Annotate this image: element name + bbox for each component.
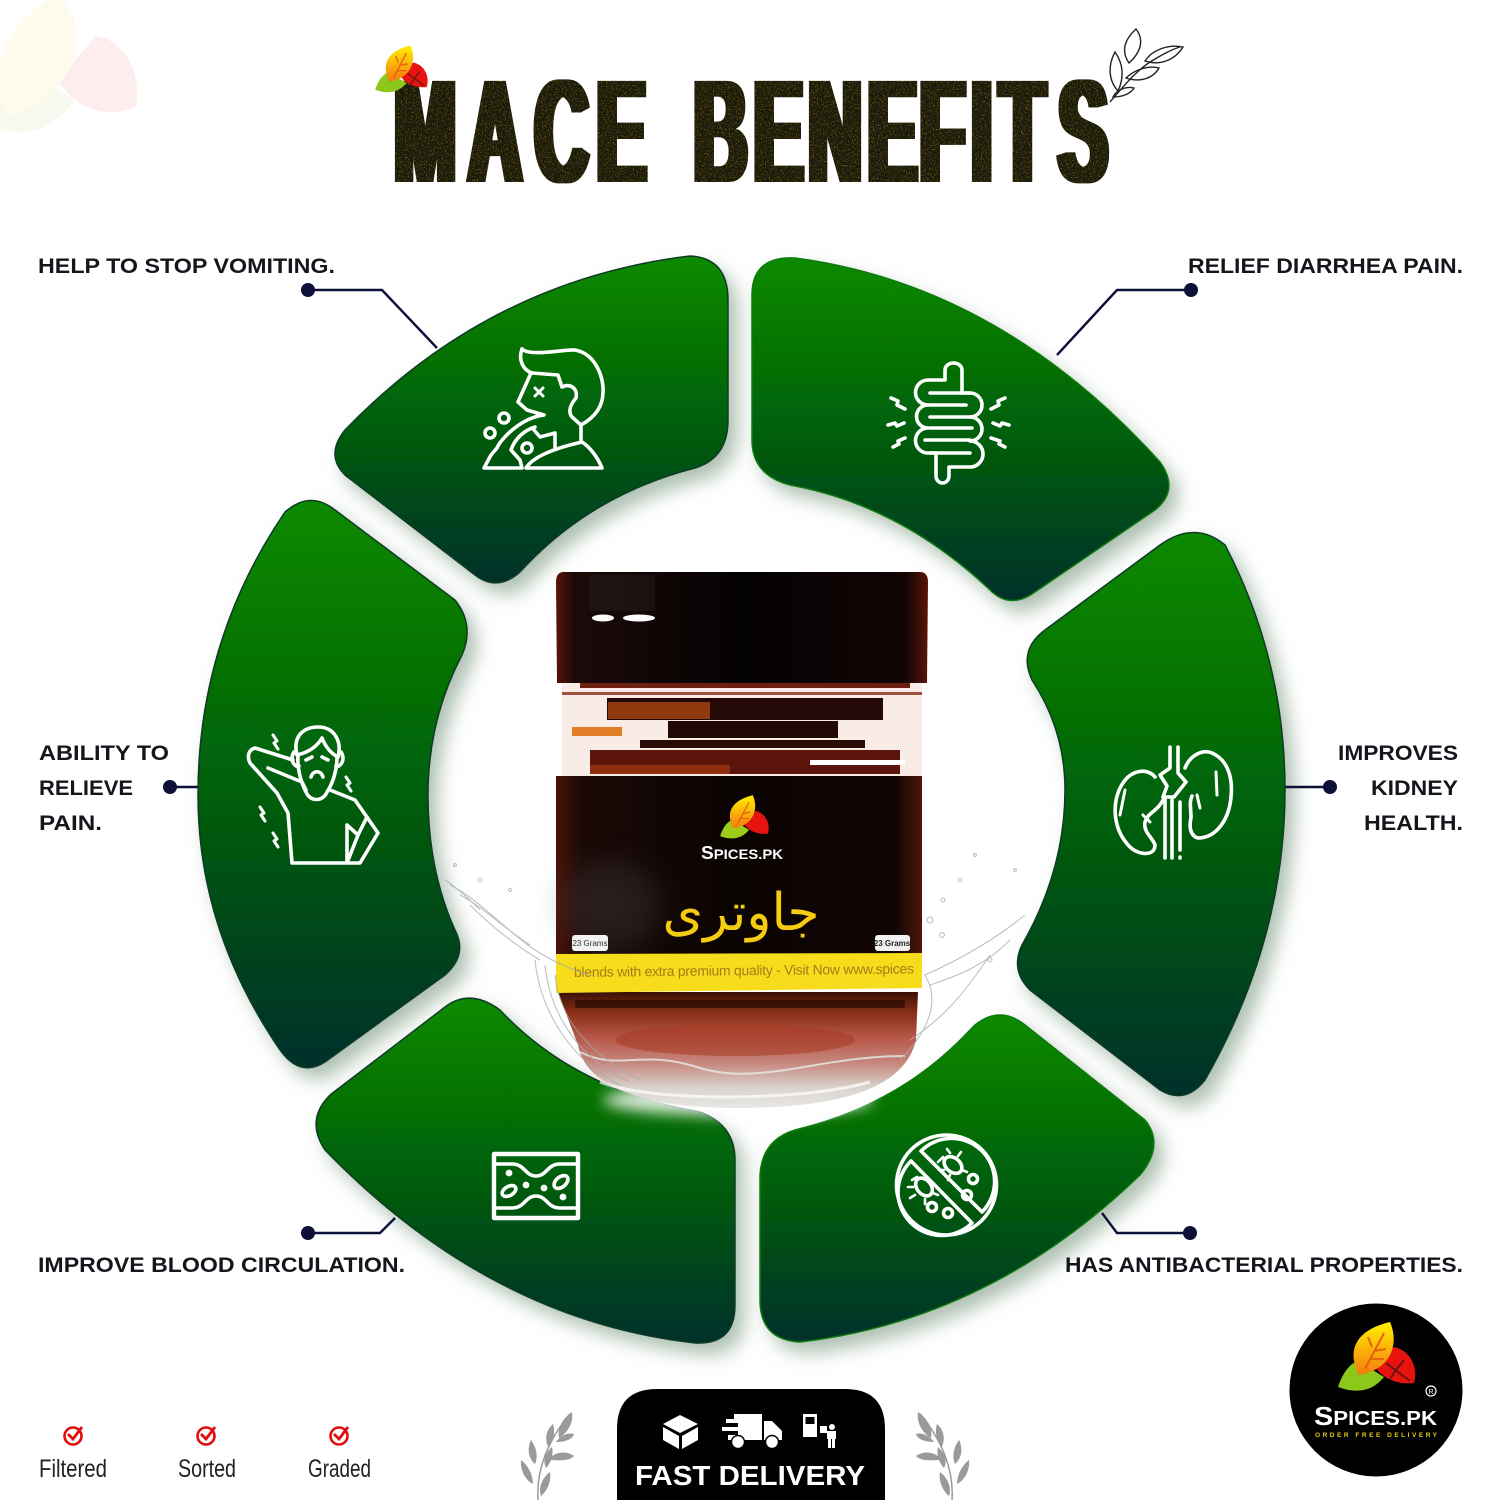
icon: blood vessel xyxy=(494,1154,578,1218)
panel: pain wedge xyxy=(198,500,467,1068)
icon: title sprig xyxy=(1110,29,1183,102)
icon: truck xyxy=(722,1414,782,1448)
badge: graded: Graded xyxy=(308,1455,371,1483)
connector: pain xyxy=(163,780,198,794)
connector: antibacterial xyxy=(1102,1213,1197,1240)
text: ability to relieve pain: ABILITY TO xyxy=(39,742,169,765)
text: relief diarrhea pain: RELIEF DIARRHEA PAIN. xyxy=(1188,255,1463,278)
jar weight tags xyxy=(572,935,911,951)
logo: spices.pk badge: R xyxy=(1428,1389,1434,1396)
jar yellow band xyxy=(556,953,922,993)
jar lid xyxy=(556,572,928,683)
decorative sprig left xyxy=(521,1412,574,1500)
text: ability to relieve pain: PAIN. xyxy=(39,812,102,835)
panel: antibacterial wedge xyxy=(760,1015,1154,1342)
panel: diarrhea wedge xyxy=(752,258,1169,601)
text: help to stop vomiting: HELP TO STOP VOMITING. xyxy=(38,255,335,278)
text: improve blood circulation: IMPROVE BLOOD CIRCULATION. xyxy=(38,1254,405,1277)
icon: vomiting man xyxy=(484,349,603,468)
icon: delivery kiosk xyxy=(803,1414,836,1448)
logo: spices.pk badge: ORDER FREE DELIVERY xyxy=(1315,1432,1438,1439)
jar urdu name: جاوتری xyxy=(663,883,819,943)
jar label xyxy=(556,776,922,956)
decorative sprig right xyxy=(916,1412,969,1500)
icon: intestine xyxy=(888,363,1009,483)
text: improves kidney health: KIDNEY xyxy=(1371,777,1458,800)
text: fast delivery: FAST DELIVERY xyxy=(635,1460,865,1491)
badge: sorted: Sorted xyxy=(178,1455,236,1483)
badge: filtered: Filtered xyxy=(39,1455,107,1483)
icon: kidneys xyxy=(1115,747,1231,858)
panel: blood circulation wedge xyxy=(316,998,735,1343)
jar weight tags: 23 Grams xyxy=(874,939,911,948)
badge: sorted xyxy=(178,1427,236,1483)
water splash xyxy=(445,854,1025,1085)
title: BENEFITS xyxy=(694,49,1108,214)
text: has antibacterial properties: HAS ANTIBACTERIAL PROPERTIES. xyxy=(1065,1254,1463,1277)
text: improves kidney health: HEALTH. xyxy=(1364,812,1463,835)
text: ability to relieve pain xyxy=(39,742,169,835)
title: MACE xyxy=(394,49,646,214)
jar leaves logo xyxy=(720,795,769,838)
text: improves kidney health xyxy=(1338,742,1463,835)
faded leaves watermark xyxy=(0,0,137,132)
product jar xyxy=(445,572,1025,1116)
panel: vomiting wedge xyxy=(335,256,728,583)
jar weight tags: 23 Grams xyxy=(572,939,608,948)
jar base xyxy=(558,992,918,1108)
icon: title leaves xyxy=(375,46,428,92)
logo: spices.pk badge xyxy=(1290,1304,1462,1476)
connector: vomiting xyxy=(301,283,437,348)
badge: graded xyxy=(308,1427,371,1483)
icon: no bacteria xyxy=(896,1135,996,1235)
connector: diarrhea xyxy=(1057,283,1198,355)
text: ability to relieve pain: RELIEVE xyxy=(39,777,133,800)
text: improves kidney health: IMPROVES xyxy=(1338,742,1458,765)
logo: spices.pk badge: SPICES.PK xyxy=(1314,1401,1438,1431)
jar neck xyxy=(562,683,922,776)
jar brand text: SPICES.PK xyxy=(701,843,783,863)
connector: blood circulation xyxy=(301,1218,395,1240)
jar glow xyxy=(603,1084,873,1116)
connector: kidney xyxy=(1285,780,1337,794)
panel: fast delivery xyxy=(617,1389,885,1500)
badge: filtered xyxy=(39,1427,107,1483)
title xyxy=(394,49,1108,214)
panel: kidney wedge xyxy=(1018,532,1285,1096)
icon: man with neck pain xyxy=(248,727,378,863)
jar yellow band: blends with extra premium quality - Visit Now www.spices xyxy=(574,960,914,980)
icon: parcel xyxy=(663,1415,698,1449)
